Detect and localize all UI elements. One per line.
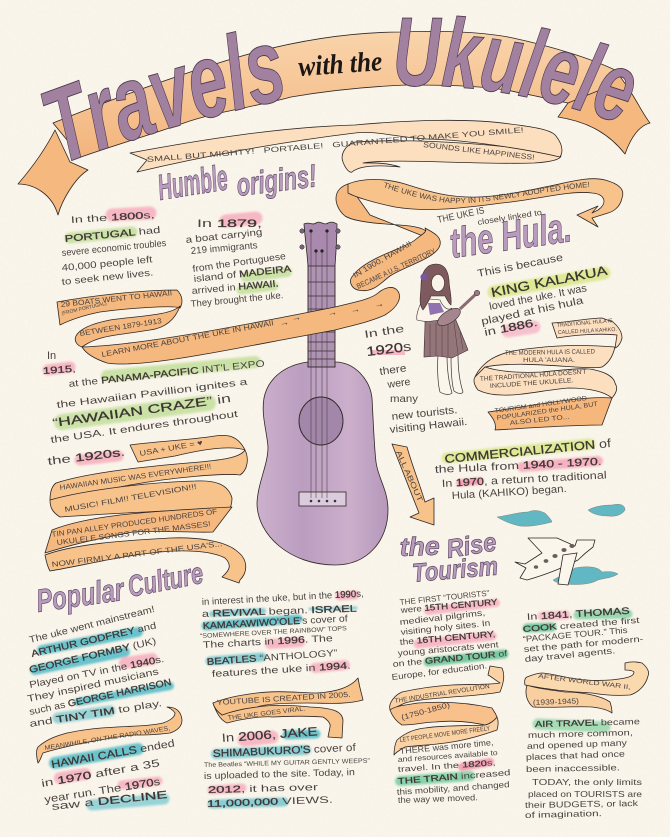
text: 1879: from the Portuguese bbox=[192, 251, 287, 275]
text: tourists lines: were bbox=[386, 376, 411, 391]
highlights bbox=[447, 444, 598, 483]
ribbon text: territory: BECAME A U.S. TERRITORY bbox=[355, 246, 437, 291]
text: air travel: their BUDGETS, or lack bbox=[525, 798, 639, 810]
ribbon: YouTube: THE UKE GOES VIRAL. bbox=[227, 706, 306, 722]
text: Jake Shimabukuro bbox=[204, 724, 370, 810]
text: Thomas Cook bbox=[522, 606, 644, 664]
text: King Kalakua: played at his hula bbox=[480, 295, 585, 328]
text: 1879: In 1879 , bbox=[197, 218, 262, 230]
text: 1879 bbox=[185, 218, 293, 310]
text: mainstream lines: The uke went mainstream! bbox=[28, 604, 156, 646]
banner left tail bbox=[18, 130, 88, 215]
arrows on ribbon: → bbox=[373, 298, 385, 311]
text: pilgrims bbox=[391, 589, 508, 682]
section heading: the Rise of Tourism bbox=[399, 526, 499, 588]
text: Jake Shimabukuro: SHIMABUKURO'S cover of bbox=[213, 742, 356, 760]
text: the train: and resources available to bbox=[398, 748, 498, 764]
text: King Kalakua bbox=[476, 252, 609, 339]
text: revival lines: BEATLES “ANTHOLOGY” bbox=[206, 648, 338, 668]
text: air travel: and opened up many bbox=[527, 737, 628, 751]
highlight bbox=[375, 351, 402, 354]
intro text: closely linked to bbox=[477, 208, 543, 227]
arms and top bbox=[417, 299, 452, 322]
hair flower bbox=[420, 273, 428, 281]
text: Jake Shimabukuro: In 2006 , JAKE bbox=[221, 724, 318, 745]
dress top bbox=[428, 303, 444, 315]
ribbon text: 29 boats: 29 BOATS WENT TO HAWAII bbox=[60, 288, 173, 309]
text: 1800s: In the 1800 s, bbox=[71, 210, 155, 226]
text: pilgrims: medieval pilgrims, bbox=[399, 607, 486, 627]
text: mainstream lines: Played on TV in the 1940s. bbox=[28, 654, 165, 691]
ukulele neck and frets bbox=[308, 262, 335, 367]
text: expo lines: 1915 , bbox=[42, 364, 76, 377]
text: commercialization lines: the Hula from 1940 - 1970 . bbox=[435, 456, 602, 476]
ribbon text: learn more: LEARN MORE ABOUT THE UKE IN HAWAII bbox=[101, 318, 274, 359]
heading word: origins: origins! bbox=[234, 157, 318, 203]
highlights bbox=[35, 632, 170, 805]
ribbon: after World War II bbox=[525, 662, 649, 713]
ribbon: YouTube bbox=[213, 678, 363, 738]
ribbon texts: TRADITIONAL HULA IS bbox=[557, 318, 613, 329]
text: 1879: island of MADEIRA bbox=[193, 264, 293, 285]
ribbon texts: INCLUDE THE UKULELE. bbox=[490, 377, 574, 390]
text: Jake Shimabukuro: 2012 , it has over bbox=[208, 782, 318, 796]
ribbon band: learn more bbox=[82, 287, 400, 364]
cloud bbox=[588, 504, 625, 516]
ribbon segment: USA + UKE bbox=[130, 435, 245, 462]
text: Thomas Cook: “PACKAGE TOUR.” This bbox=[522, 625, 628, 644]
ribbon: industrial revolution: LET PEOPLE MOVE MORE FREELY bbox=[399, 725, 491, 744]
text: expo lines: “HAWAIIAN CRAZE ” in bbox=[51, 391, 232, 430]
text: 1800s: severe economic troubles bbox=[61, 238, 167, 259]
text: air travel: been inaccessible. bbox=[526, 762, 620, 774]
ribbon text: 1900: IN 1900, HAWAII bbox=[352, 239, 413, 280]
ribbon segment: now firmly bbox=[45, 538, 246, 583]
text: pilgrims: Europe, for education. bbox=[391, 660, 488, 682]
ribbon: YouTube: YOUTUBE IS CREATED IN 2005. bbox=[217, 690, 351, 707]
text: air travel: places that had once bbox=[526, 749, 625, 762]
text: air travel: of imagination. bbox=[525, 808, 602, 820]
text: tourists lines: new tourists. bbox=[391, 404, 458, 423]
section heading: Humble origins bbox=[155, 156, 318, 208]
text: expo lines bbox=[42, 350, 265, 468]
ribbon: tourism and Hollywood bbox=[488, 398, 612, 430]
text: 1800s: 40,000 people left bbox=[61, 254, 153, 274]
text: mainstream lines: GEORGE FORMBY (UK) bbox=[28, 636, 157, 676]
text: tourists lines: there bbox=[379, 362, 407, 378]
ribbon text: USA + UKE: USA + UKE = ♥ bbox=[139, 438, 204, 458]
tagline text: SMALL BUT MIGHTY! PORTABLE! GUARANTEED TO MAKE YOU SMILE! bbox=[146, 125, 524, 164]
panel: the Hula bbox=[436, 203, 622, 430]
ribbon: USA plus uke bbox=[45, 435, 247, 583]
ribbon band: 1900 territory bbox=[350, 228, 440, 291]
text: air travel: AIR TRAVEL became bbox=[535, 716, 640, 729]
text: commercialization lines: COMMERCIALIZATION of bbox=[444, 436, 612, 466]
ribbon texts: ALSO LED TO... bbox=[509, 414, 570, 427]
text: revival lines: in interest in the uke, but in the 1990s, bbox=[202, 589, 364, 608]
grass skirt bbox=[424, 318, 468, 358]
text: Hawaii Calls: HAWAII CALLS ended bbox=[50, 737, 176, 771]
ribbon stack: hula facts bbox=[474, 318, 622, 430]
arrows on ribbon: → bbox=[279, 317, 290, 329]
text: 1800s bbox=[61, 210, 167, 288]
clouds and airplane bbox=[497, 504, 625, 585]
tagline ribbon bbox=[130, 120, 562, 172]
text: mainstream lines bbox=[26, 604, 173, 730]
ribbon segment: Hawaiian music bbox=[50, 450, 247, 500]
text: revival lines bbox=[200, 589, 364, 680]
text: King Kalakua: KING KALAKUA bbox=[490, 263, 609, 300]
title words: with the: with the bbox=[297, 46, 383, 83]
ribbon segment: music film bbox=[50, 481, 232, 517]
text: 1800s: PORTUGAL had bbox=[64, 225, 161, 245]
ribbon: industrial revolution: (1750-1850) bbox=[400, 700, 451, 722]
ribbon segment: Tin Pan Alley bbox=[45, 507, 232, 553]
arrows on ribbon: → bbox=[350, 304, 361, 316]
ribbon text: Tin Pan Alley: TIN PAN ALLEY PRODUCED HUNDREDS OF bbox=[51, 507, 218, 539]
arrows on ribbon: → bbox=[291, 312, 302, 324]
text: Thomas Cook: day travel agents. bbox=[524, 645, 616, 664]
text: pilgrims: young aristocrats went bbox=[397, 639, 500, 658]
text: the train: THERE was more time, bbox=[399, 737, 494, 756]
text: the train: THE TRAIN increased bbox=[397, 767, 511, 786]
girl's ukulele bbox=[435, 290, 480, 329]
title word: Travels: Travels bbox=[40, 31, 283, 162]
text: air travel: placed on TOURISTS are bbox=[528, 789, 642, 799]
ribbon text: between: BETWEEN 1879-1913 bbox=[79, 316, 162, 338]
panel: Thomas Cook and air travel bbox=[522, 606, 649, 820]
heading word: Tourism: Tourism bbox=[411, 551, 499, 588]
text: expo lines: the Hawaiian Pavillion ignites a bbox=[56, 377, 249, 411]
tagline ribbon front bbox=[130, 120, 562, 172]
panel: revival and YouTube bbox=[200, 589, 370, 810]
text: King Kalakua: in 1886 . bbox=[483, 317, 539, 339]
text: the train: this mobility, and changed bbox=[396, 779, 510, 797]
text: Thomas Cook: set the path for modern- bbox=[523, 634, 644, 654]
ribbon: after World War II: (1939-1945) bbox=[533, 696, 580, 707]
ukulele illustration bbox=[257, 222, 388, 565]
airplane bbox=[515, 538, 595, 585]
text: pilgrims: THE FIRST “TOURISTS” bbox=[399, 589, 490, 607]
ukulele bridge bbox=[299, 492, 346, 506]
text: Thomas Cook: In 1841 , THOMAS bbox=[527, 606, 630, 623]
text: air travel: much more common, bbox=[528, 727, 633, 740]
text: air travel: TODAY, the only limits bbox=[532, 777, 642, 787]
ribbon text: Hawaiian music: HAWAIIAN MUSIC WAS EVERYWHERE!!! bbox=[59, 462, 212, 492]
ribbon texts: HULA 'AUANA. bbox=[523, 357, 575, 364]
text: the train bbox=[396, 737, 511, 805]
banner right tail bbox=[558, 70, 650, 154]
text: revival lines: features the uke in 1994 . bbox=[212, 661, 351, 680]
ribbon: radio waves: MEANWHILE, ON THE RADIO WAVES, bbox=[44, 725, 171, 752]
ribbon: industrial revolution: THE INDUSTRIAL REVOLUTION bbox=[394, 683, 490, 705]
highlights bbox=[527, 614, 628, 727]
ribbon text: now firmly: NOW FIRMLY A PART OF THE USA'S... bbox=[51, 539, 223, 569]
ribbon text: from Portugal: (FROM PORTUGAL) bbox=[61, 301, 108, 317]
ribbon texts: THE MODERN HULA IS CALLED bbox=[505, 348, 595, 357]
text: Thomas Cook: COOK created the first bbox=[522, 615, 641, 634]
arrow: all about: ALL ABOUT bbox=[394, 449, 425, 504]
ribbon: industrial revolution bbox=[390, 666, 504, 755]
text: 1879: arrived in HAWAII. bbox=[191, 278, 279, 297]
ribbon segment: 29 boats bbox=[57, 290, 182, 325]
heading word: Popular: Popular bbox=[34, 571, 127, 619]
panel: Panama-Pacific expo bbox=[42, 350, 265, 468]
arrows on ribbon: → bbox=[327, 307, 338, 319]
ribbon text: music film: MUSIC! FILM!! TELEVISION!!! bbox=[64, 482, 197, 514]
text: Hawaii Calls: saw a DECLINE bbox=[51, 789, 168, 813]
cloud behind plane bbox=[553, 567, 618, 585]
text: mainstream lines: They inspired musicians bbox=[26, 666, 160, 705]
text: commercialization lines: Hula (KAHIKO) began. bbox=[451, 483, 567, 502]
intro text: THE UKE IS bbox=[436, 205, 486, 226]
heading word: the: the bbox=[399, 531, 440, 562]
heading: the Hula: the Hula. bbox=[447, 203, 574, 267]
ribbon: Hawaii territory and learn more bbox=[82, 178, 624, 364]
arrow: all about bbox=[392, 444, 434, 525]
text: pilgrims: were 15TH CENTURY bbox=[399, 597, 498, 615]
heading word: Culture: Culture bbox=[125, 557, 206, 604]
text: expo lines: the 1920s . bbox=[47, 447, 126, 468]
ribbon back loop bbox=[336, 184, 428, 238]
text: tourists lines: visiting Hawaii. bbox=[389, 416, 468, 436]
text: air travel bbox=[525, 716, 642, 820]
text: revival lines: “SOMEWHERE OVER THE RAINBOW” TOPS bbox=[200, 625, 348, 640]
hair bbox=[420, 264, 451, 310]
text: the train: travel. In the 1820 s, bbox=[398, 758, 496, 774]
text: expo lines: the USA. It endures throughout bbox=[50, 409, 239, 446]
ribbon: modern hula bbox=[475, 346, 615, 377]
text: Jake Shimabukuro: is uploaded to the site. Today, in bbox=[204, 767, 355, 782]
text: pilgrims: on the GRAND TOUR of bbox=[392, 648, 508, 669]
text: Hawaii Calls: in 1970 after a 35 bbox=[40, 757, 161, 790]
title banner bbox=[18, 16, 650, 216]
cloud bbox=[497, 510, 552, 526]
text: tourists lines: In the bbox=[364, 323, 405, 341]
ribbon texts bbox=[480, 318, 617, 427]
legs bbox=[438, 355, 463, 394]
highlights bbox=[206, 595, 356, 804]
panel: commercialization bbox=[435, 436, 612, 502]
heading word: Humble: Humble bbox=[155, 156, 230, 208]
ribbon top band bbox=[348, 179, 623, 227]
ribbon texts: POPULARIZED the HULA, BUT bbox=[496, 401, 598, 422]
tagline text: happiness: SOUNDS LIKE HAPPINESS! bbox=[423, 140, 535, 162]
text: mainstream lines: such as GEORGE HARRISON bbox=[28, 677, 173, 718]
ukulele body bbox=[257, 362, 388, 565]
hula girl illustration bbox=[417, 264, 480, 394]
highlights bbox=[70, 213, 287, 290]
text: revival lines: KAMAKAWIWO'OLE 's cover of bbox=[203, 613, 348, 632]
ribbon: after World War II: AFTER WORLD WAR II, bbox=[538, 673, 631, 691]
text: Jake Shimabukuro: The Beatles “WHILE MY GUITAR GENTLY WEEPS” bbox=[204, 758, 370, 769]
heading word: Rise: Rise bbox=[444, 526, 498, 564]
ukulele strings bbox=[311, 231, 327, 498]
text: pilgrims: visiting holy sites. In bbox=[400, 618, 491, 637]
text: the train: the way we moved. bbox=[398, 792, 478, 805]
text: 1879: a boat carrying bbox=[185, 227, 263, 246]
arrows on ribbon bbox=[279, 298, 385, 329]
text: 1800s: to seek new lives. bbox=[61, 267, 154, 288]
text: mainstream lines: and TINY TIM to play. bbox=[29, 698, 163, 730]
text: commercialization lines bbox=[435, 436, 612, 502]
ribbon segment: between bbox=[75, 306, 180, 347]
ribbon: no ukulele bbox=[474, 367, 617, 398]
text: Hawaii Calls bbox=[40, 737, 176, 813]
highlights bbox=[400, 603, 504, 781]
banner centre band bbox=[53, 31, 615, 157]
section heading: Popular Culture bbox=[34, 557, 206, 619]
ribbon text: uke was happy: THE UKE WAS HAPPY IN ITS NEWLY ADOPTED HOME! bbox=[384, 182, 590, 204]
panel: Portugal text bbox=[61, 210, 293, 310]
text: tourists lines: 1920 s bbox=[366, 339, 413, 359]
ribbon: radio waves bbox=[36, 707, 182, 763]
text: King Kalakua: loved the uke. It was bbox=[488, 282, 588, 313]
intro text bbox=[436, 205, 543, 227]
text: tourists lines: many bbox=[390, 393, 419, 405]
text: King Kalakua: This is because bbox=[476, 252, 564, 280]
panel: first tourists bbox=[390, 589, 511, 805]
text: Jake Shimabukuro: 11,000,000 VIEWS. bbox=[207, 795, 333, 810]
ribbon texts: CALLED HULA KAHIKO. bbox=[558, 327, 617, 336]
text: mainstream lines: ARTHUR GODFREY and bbox=[30, 620, 157, 660]
ribbon texts: THE TRADITIONAL HULA DOESN'T bbox=[480, 369, 587, 383]
panel: uke went mainstream bbox=[26, 604, 182, 813]
ribbon: traditional hula bbox=[552, 318, 622, 348]
highlights bbox=[494, 273, 604, 331]
text: commercialization lines: In 1970 , a return to traditional bbox=[442, 469, 607, 490]
text: Hawaii Calls: year run. The 1970 s bbox=[44, 776, 161, 806]
text: revival lines: The charts in 1996 . The bbox=[203, 633, 333, 651]
tagline ribbon back fold bbox=[342, 141, 561, 172]
ribbon: boats to Hawaii bbox=[57, 288, 182, 347]
panel: 1920s tourists bbox=[364, 323, 468, 436]
ribbon text: ukulele songs: UKULELE SONGS FOR THE MASSES! bbox=[56, 519, 211, 547]
highlights bbox=[48, 362, 255, 460]
text: 1879: 219 immigrants bbox=[190, 240, 258, 257]
ribbon texts: TOURISM and HOLLYWOOD bbox=[494, 395, 588, 415]
text: revival lines: a REVIVAL began. ISRAEL bbox=[202, 604, 357, 620]
text: pilgrims: the 16TH CENTURY , bbox=[399, 629, 496, 647]
text: expo lines: In bbox=[47, 350, 56, 362]
title word: Ukulele: Ukulele bbox=[396, 16, 634, 120]
text: 1879: They brought the uke. bbox=[190, 290, 284, 310]
ukulele sound hole bbox=[299, 397, 343, 445]
text: tourists lines bbox=[364, 323, 468, 436]
face bbox=[432, 274, 444, 292]
ukulele headstock bbox=[300, 222, 340, 266]
text: expo lines: at the PANAMA-PACIFIC INT'L EXPO bbox=[68, 358, 265, 390]
